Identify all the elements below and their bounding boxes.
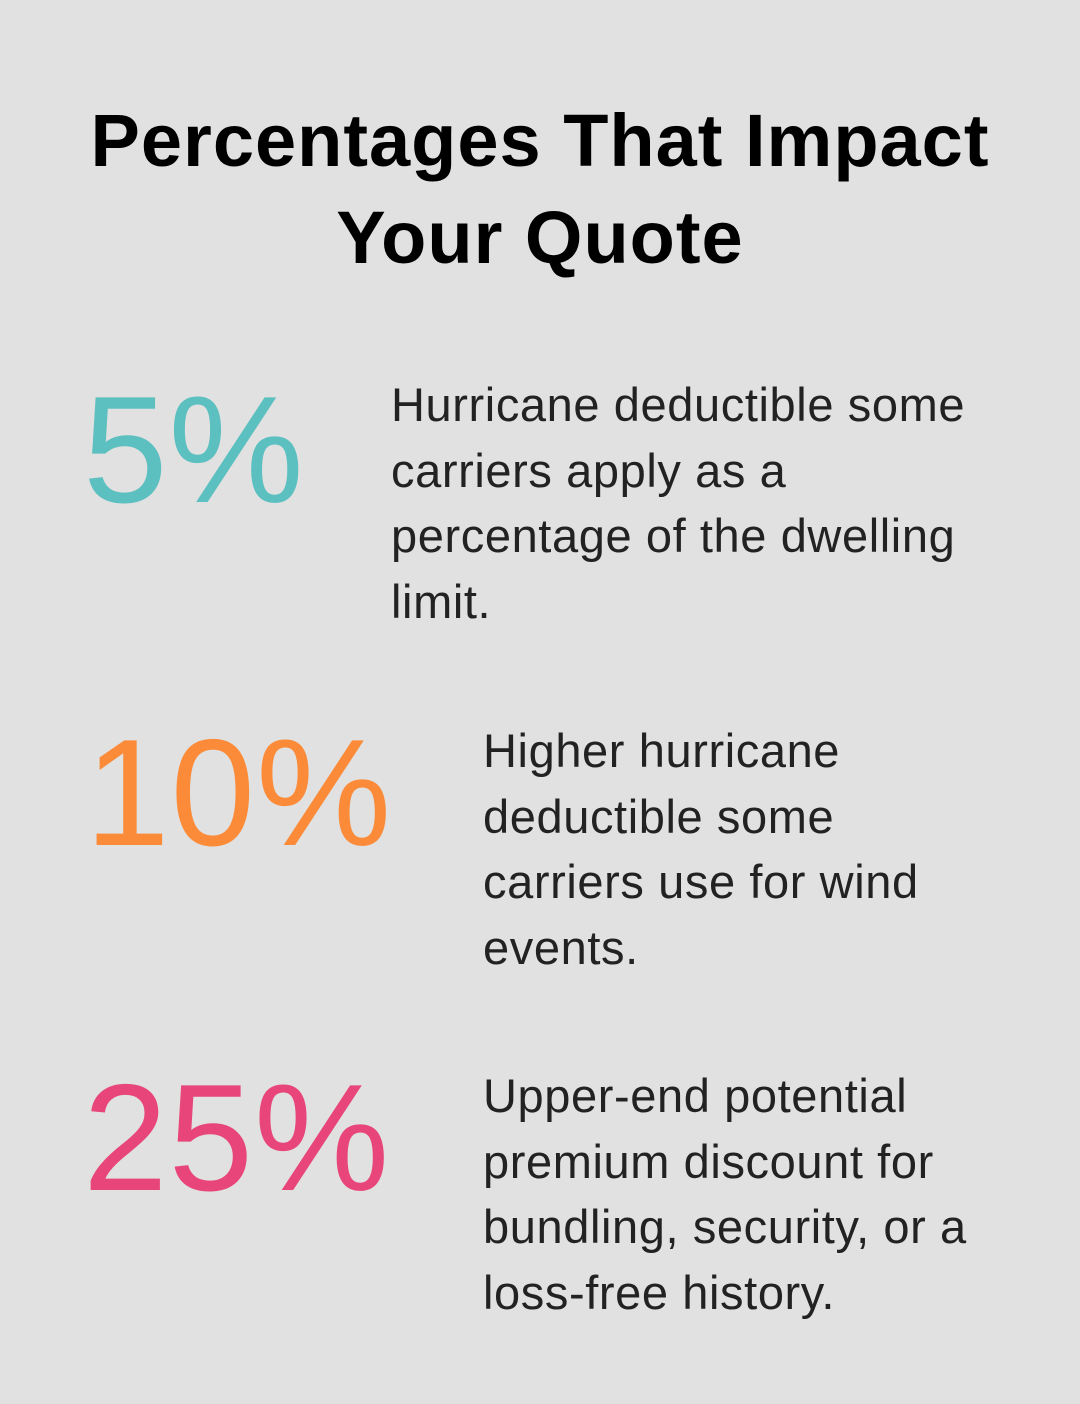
text: premium discount: Upper-end potential premium discount for bundling, security, or a loss-free history. — [483, 1069, 967, 1318]
stat: 10% — [85, 708, 919, 974]
number: 5%: 5% — [83, 365, 305, 535]
text: hurricane deductible: Hurricane deductible some carriers apply as a percentage of the dwelling limit. — [391, 378, 965, 628]
stat: 25% — [83, 1053, 967, 1319]
title: Your Quote — [336, 196, 744, 279]
title — [91, 99, 989, 279]
number: 25%: 25% — [83, 1053, 390, 1223]
number: 10%: 10% — [85, 708, 392, 878]
text: higher hurricane deductible: Higher hurricane deductible some carriers use for wind events. — [483, 724, 919, 974]
stat: 5% — [83, 365, 965, 628]
title: Percentages That Impact — [91, 99, 989, 182]
